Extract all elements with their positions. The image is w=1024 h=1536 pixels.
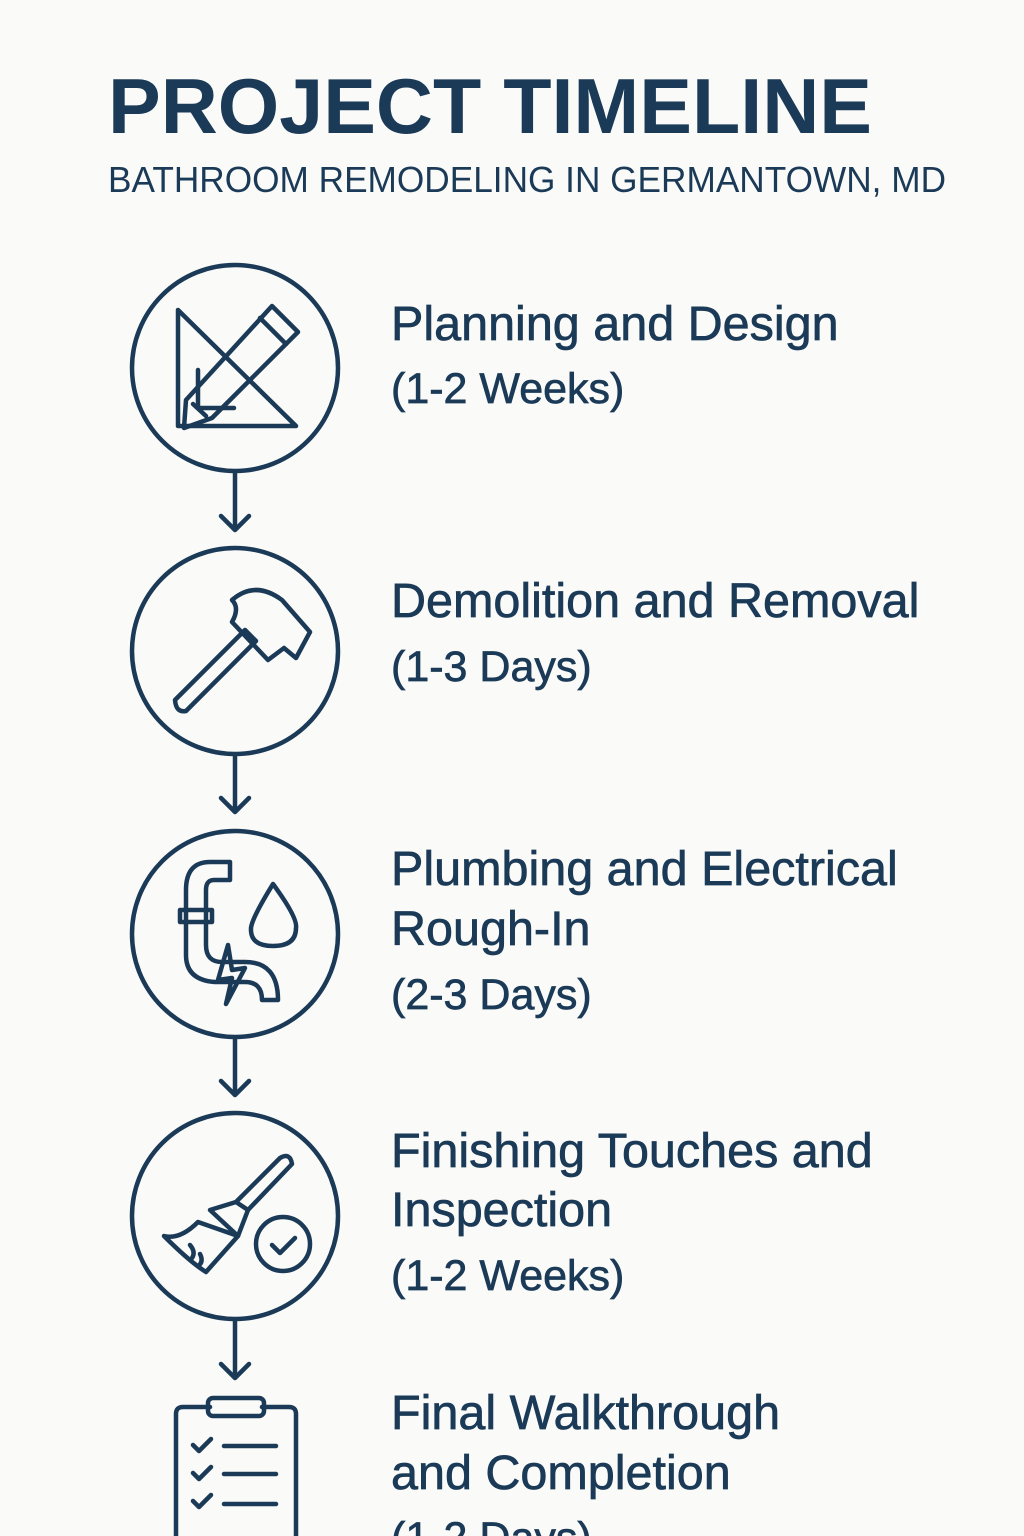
step 3 text: Plumbing and Electrical bbox=[391, 842, 898, 896]
step 1 text: (1-2 Weeks) bbox=[391, 365, 624, 413]
icon: planning circle bbox=[132, 265, 338, 471]
step 3 text: Rough-In bbox=[391, 902, 591, 956]
icon: clipboard bbox=[176, 1398, 296, 1536]
step 4 text: Inspection bbox=[391, 1183, 612, 1237]
step 3 text: (2-3 Days) bbox=[391, 971, 592, 1019]
step 5 text: Final Walkthrough bbox=[391, 1386, 780, 1440]
arrow 3 bbox=[221, 1038, 249, 1095]
step 1 text bbox=[391, 297, 839, 413]
subtitle: BATHROOM REMODELING IN GERMANTOWN, MD bbox=[108, 159, 946, 200]
step 2 text bbox=[391, 574, 919, 691]
step 4 text bbox=[391, 1124, 873, 1300]
title: PROJECT TIMELINE bbox=[108, 62, 872, 150]
step 5 text bbox=[391, 1386, 780, 1536]
arrow 2 bbox=[221, 755, 249, 812]
step 2 text: Demolition and Removal bbox=[391, 574, 919, 628]
arrow 1 bbox=[221, 472, 249, 530]
step 4 text: Finishing Touches and bbox=[391, 1124, 873, 1178]
step 4 text: (1-2 Weeks) bbox=[391, 1252, 624, 1300]
step 3 text bbox=[391, 842, 898, 1019]
step 5 text: and Completion bbox=[391, 1446, 731, 1500]
step 1 text: Planning and Design bbox=[391, 297, 839, 351]
icon: finishing circle bbox=[132, 1113, 338, 1319]
icon: plumbing circle bbox=[132, 831, 338, 1037]
step 2 text: (1-3 Days) bbox=[391, 643, 592, 691]
icon: hammer circle bbox=[132, 548, 338, 754]
arrow 4 bbox=[221, 1320, 249, 1378]
